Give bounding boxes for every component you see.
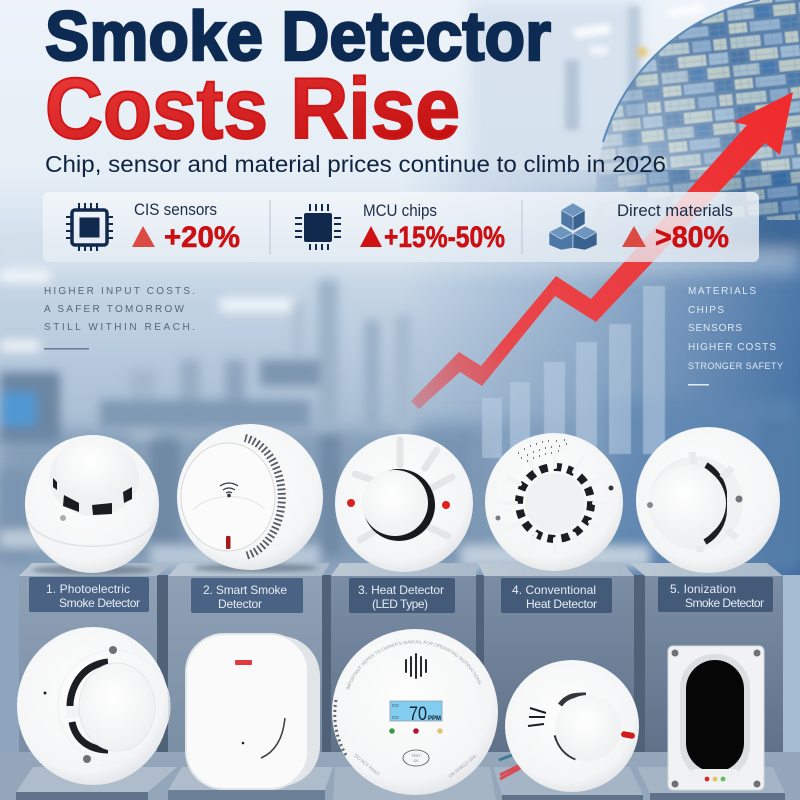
detector 8: CO alarm: OK — [413, 759, 419, 763]
detector 8: CO alarm: DO NOT PAINT — [353, 753, 381, 777]
icon: speaker slots — [406, 654, 426, 678]
right tagline: HIGHER COSTS — [688, 342, 776, 353]
label 3: (LED Type) — [372, 597, 428, 611]
right tagline: CHIPS — [688, 305, 724, 316]
detector 3: heat LED — [335, 434, 473, 572]
icon: CIS sensor chip — [66, 203, 113, 251]
label 1 — [29, 577, 149, 612]
title — [45, 0, 551, 157]
LCD display: PPM — [428, 716, 441, 722]
stat: Direct materials: Direct materials — [617, 201, 733, 220]
right tagline: MATERIALS — [688, 286, 756, 297]
label 5: Smoke Detector — [685, 596, 764, 610]
title: Costs Rise — [45, 61, 460, 157]
detector 2: smart smoke — [177, 424, 323, 572]
stat: CIS sensors: +20% — [164, 221, 240, 254]
detector 10: beam detector — [668, 646, 764, 790]
right tagline — [688, 286, 783, 386]
left tagline: STILL WITHIN REACH. — [44, 322, 195, 333]
LCD display — [390, 701, 442, 725]
left tagline: HIGHER INPUT COSTS. — [44, 286, 195, 297]
stat: MCU chips: +15%-50% — [384, 221, 505, 254]
factory lights — [565, 4, 705, 156]
icon: MCU chip — [295, 204, 341, 250]
detector 8: CO alarm: IMPORTANT: REFER TO OWNER'S MANUAL FOR OPERATING INSTRUCTIONS — [346, 640, 482, 690]
label 5: 5. Ionization — [670, 582, 736, 596]
subtitle: Chip, sensor and material prices continue to climb in 2026 — [45, 151, 666, 177]
labels — [29, 577, 773, 613]
detector 7: square smart — [186, 634, 320, 789]
rising red arrow — [411, 92, 793, 409]
detector 6: addressable smoke — [17, 627, 170, 785]
detector 1: photoelectric — [25, 435, 159, 575]
stat: CIS sensors: CIS sensors — [134, 200, 217, 219]
left tagline — [44, 286, 195, 350]
stat: MCU chips — [295, 201, 505, 254]
LCD display: CO — [392, 715, 399, 720]
detector 8: CO alarm: TEST — [412, 754, 421, 758]
pedestals — [0, 563, 800, 800]
stat: Direct materials: >80% — [655, 221, 729, 254]
label 1: 1. Photoelectric — [46, 582, 130, 596]
stat: MCU chips: MCU chips — [363, 201, 437, 220]
label 3 — [349, 578, 455, 613]
right tagline: SENSORS — [688, 323, 742, 334]
left tagline: A SAFER TOMORROW — [44, 304, 185, 315]
stat: Direct materials — [549, 201, 733, 254]
label 2 — [191, 578, 303, 613]
right tagline: STRONGER SAFETY — [688, 361, 783, 371]
stat: CIS sensors — [66, 200, 240, 254]
label 1: Smoke Detector — [59, 596, 140, 610]
panel: cost statistics — [43, 192, 759, 262]
detector 8: CO alarm: ON SHIELD OFF — [448, 753, 478, 779]
label 4: Heat Detector — [526, 597, 597, 611]
label 3: 3. Heat Detector — [358, 583, 444, 597]
bar chart — [482, 286, 665, 458]
LCD display: 70 — [409, 704, 427, 725]
wires — [499, 754, 522, 779]
label 4: 4. Conventional — [512, 583, 596, 597]
detector 8: CO alarm — [332, 629, 498, 795]
label 2: Detector — [218, 597, 262, 611]
semiconductor wafer — [596, 0, 800, 220]
label 4 — [501, 578, 612, 613]
label 5 — [658, 577, 773, 612]
icon: stacked cubes — [549, 203, 597, 250]
detector 4: conventional heat — [485, 433, 623, 571]
LCD display: CO — [392, 703, 399, 708]
label 2: 2. Smart Smoke — [203, 583, 287, 597]
icon: wifi — [220, 483, 238, 497]
detector 9: wired smoke — [499, 660, 639, 792]
detector 5: ionization — [636, 427, 780, 573]
